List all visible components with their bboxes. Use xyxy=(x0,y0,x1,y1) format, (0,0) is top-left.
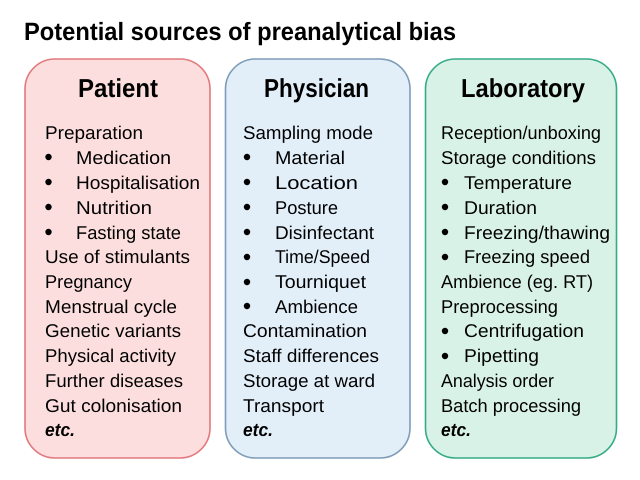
text block: laboratory list: Pipetting xyxy=(464,345,539,366)
text block: laboratory list xyxy=(441,122,610,440)
text block: laboratory list: Storage conditions xyxy=(441,147,596,168)
text block: physician list: Sampling mode xyxy=(243,122,373,143)
text block: laboratory list: Analysis order xyxy=(441,370,554,391)
text block: laboratory list: Temperature xyxy=(464,172,572,193)
text block: laboratory list: Reception/unboxing xyxy=(441,122,601,143)
text block: physician list xyxy=(243,122,379,440)
text block: patient list: Pregnancy xyxy=(45,271,133,292)
text block: laboratory list: Freezing/thawing xyxy=(464,222,610,243)
text block: patient list: Preparation xyxy=(45,122,143,143)
text block: patient list: Nutrition xyxy=(76,197,152,218)
heading: patient: Patient xyxy=(78,73,158,103)
text block: laboratory list: etc. xyxy=(441,419,471,440)
text block: patient list: Physical activity xyxy=(45,345,177,366)
text block: laboratory list: Preprocessing xyxy=(441,296,558,317)
text block: patient list: Use of stimulants xyxy=(45,246,190,267)
heading: physician: Physician xyxy=(264,73,369,103)
text block: physician list: Location xyxy=(275,172,358,193)
text block: physician list: etc. xyxy=(243,419,273,440)
text block: physician list: Time/Speed xyxy=(275,246,370,267)
text block: physician list: Staff differences xyxy=(243,345,379,366)
text block: laboratory list: Ambience (eg. RT) xyxy=(441,271,593,292)
text block: physician list: Ambience xyxy=(275,296,358,317)
panel: laboratory xyxy=(426,59,616,458)
text block: patient list: Medication xyxy=(76,147,171,168)
text block: patient list: Genetic variants xyxy=(45,320,181,341)
text block: physician list: Storage at ward xyxy=(243,370,375,391)
panel: patient xyxy=(25,59,210,458)
text block: physician list: Transport xyxy=(243,395,324,416)
text block: patient list: Gut colonisation xyxy=(45,395,182,416)
title: Potential sources of preanalytical bias xyxy=(24,18,456,46)
text block: patient list xyxy=(45,122,200,440)
text block: physician list: Contamination xyxy=(243,320,367,341)
text block: laboratory list: Batch processing xyxy=(441,395,581,416)
text block: laboratory list: Centrifugation xyxy=(464,320,584,341)
heading: laboratory: Laboratory xyxy=(461,73,585,103)
text block: patient list: Menstrual cycle xyxy=(45,296,177,317)
text block: physician list: Disinfectant xyxy=(275,222,374,243)
text block: physician list: Posture xyxy=(275,197,338,218)
text block: physician list: Material xyxy=(275,147,345,168)
text block: laboratory list: Freezing speed xyxy=(464,246,590,267)
text block: patient list: Further diseases xyxy=(45,370,183,391)
panel: physician xyxy=(226,59,410,458)
text block: patient list: etc. xyxy=(45,419,75,440)
text block: laboratory list: Duration xyxy=(464,197,537,218)
text block: patient list: Hospitalisation xyxy=(76,172,200,193)
text block: patient list: Fasting state xyxy=(76,222,181,243)
text block: physician list: Tourniquet xyxy=(275,271,366,292)
